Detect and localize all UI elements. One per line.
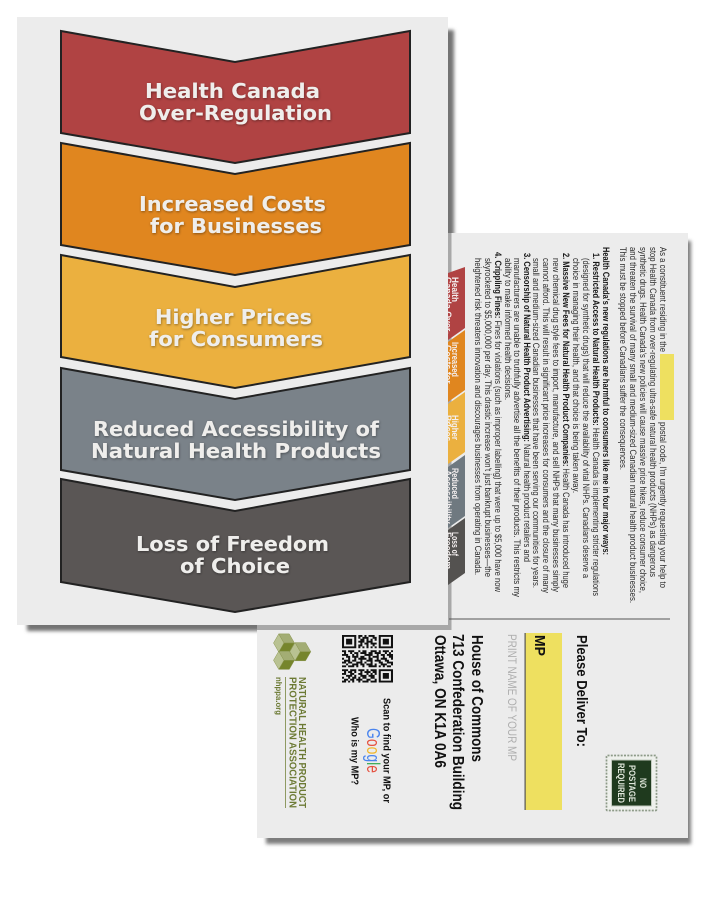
scan prompt with Google search: Googl e [363, 728, 383, 773]
mini chevron strip: Health [450, 277, 460, 302]
letter text block: small and medium-sized Canadian businesses that have been serving our communities for years. [531, 258, 541, 588]
letter text block: This must be stopped before Canadians suffer the consequences. [618, 247, 628, 470]
chevron 5: Loss of Freedom of Choice: of Choice [180, 554, 290, 578]
scan prompt with Google search: Scan to find your MP, or [380, 698, 392, 803]
chevron 2: Increased Costs for Businesses [61, 143, 410, 275]
mini chevron strip: Accessibility [443, 470, 453, 524]
panel: front of postcard [17, 17, 448, 625]
scan prompt with Google search [348, 698, 392, 803]
icon: no postage stamp: NO [638, 778, 648, 788]
letter text block: 4. Crippling Fines: Fines for violations (such as improper labelling) that were up to $5,000 have now [493, 252, 503, 593]
mailing address [431, 634, 485, 810]
letter text block: choice in managing their health, and that choice is being taken away. [571, 258, 581, 493]
chevron 3: Higher Prices for Consumers: for Consumers [149, 327, 323, 351]
chevron 3: Higher Prices for Consumers [61, 255, 410, 388]
mini chevron strip: Freedom [443, 532, 453, 569]
mini chevron strip: Loss of [450, 532, 460, 556]
mailing address: Ottawa, ON K1A 0A6 [431, 635, 448, 768]
scan prompt with Google search: Who is my MP? [348, 717, 360, 785]
chevron 2: Increased Costs for Businesses: for Businesses [150, 214, 322, 238]
mini chevron strip: Increased [450, 342, 460, 377]
letter text block: and threaten the survival of many small and medium-sized Canadian natural health product businesses. [628, 247, 638, 603]
letter text block: ability to make informed health decisions. [503, 258, 513, 400]
letter text block: heightened risk threatens innovation and discourages businesses from operating in Canada. [473, 258, 483, 575]
logo: NHPPA cubes and wordmark: nhppa.org [274, 677, 283, 715]
logo: NHPPA cubes and wordmark [274, 634, 311, 809]
mini chevron strip: Costs for [443, 345, 453, 384]
letter text block [473, 247, 674, 603]
letter text block: new chemical drug style fees to import, manufacture, and sell NHPs that many businesses simply [551, 258, 561, 593]
icon: no postage stamp [606, 756, 656, 810]
chevron 4: Reduced Accessibility of Natural Health Products: Reduced Accessibility of [93, 417, 380, 441]
mini chevron strip: Canada Over- [443, 277, 453, 334]
chevron 1: Health Canada Over-Regulation [61, 31, 410, 163]
MP name field: MP [531, 635, 547, 656]
delivery heading: Please Deliver To: [573, 635, 590, 747]
letter text block: As a constituent residing in the [658, 247, 668, 352]
logo: NHPPA cubes and wordmark: PROTECTION ASSOCIATION [286, 677, 298, 808]
letter text block: 1. Restricted Access to Natural Health Products: Health Canada is implementing stricter regulations [591, 253, 601, 597]
icon: no postage stamp: REQUIRED [616, 763, 626, 803]
letter text block: 3. Censorship of Natural Health Product Advertising: Natural health product retailers and [522, 253, 532, 562]
letter text block: (designed for synthetic drugs) that will reduce the availability of vital NHPs. Canadians deserve a [581, 258, 591, 578]
panel: back of postcard [257, 233, 691, 844]
letter text block: postal code, I'm urgently requesting your help to [658, 422, 668, 588]
logo: NHPPA cubes and wordmark: NATURAL HEALTH PRODUCT [296, 677, 307, 809]
QR code [342, 635, 393, 682]
chevron 1: Health Canada Over-Regulation: Over-Regulation [139, 101, 332, 125]
letter text block: 2. Massive New Fees for Natural Health Product Companies: Health Canada has introduced huge [561, 253, 571, 588]
letter text block: stop Health Canada from over-regulating ultra-safe natural health products (NHPs) as dangerous [648, 247, 658, 578]
chevron 2: Increased Costs for Businesses: Increased Costs [139, 192, 326, 216]
mini chevron strip [448, 267, 465, 585]
chevron 1: Health Canada Over-Regulation: Health Canada [145, 79, 320, 103]
MP name field [524, 633, 562, 810]
print name caption: PRINT NAME OF YOUR MP [505, 634, 517, 761]
letter text block: synthetic drugs. Health Canada's new policies will cause massive price hikes, reduce consumer choice, [638, 247, 648, 593]
chevron 4: Reduced Accessibility of Natural Health Products [61, 368, 410, 500]
icon: no postage stamp: POSTAGE [627, 765, 637, 802]
letter text block: skyrocketed to $5,000,000 per day. This drastic increase won't just bankrupt businesses—the [483, 258, 493, 577]
mini chevron strip: Reduced [450, 468, 460, 499]
chevron 4: Reduced Accessibility of Natural Health Products: Natural Health Products [91, 439, 381, 463]
mini chevron strip: Higher [450, 415, 460, 441]
chevron 5: Loss of Freedom of Choice [61, 479, 410, 612]
icon: three isometric cubes [274, 634, 311, 669]
letter text block: Health Canada's new regulations are harmful to consumers like me in four major ways: [601, 247, 611, 555]
mailing address: 713 Confederation Building [449, 634, 466, 810]
mini chevron strip: Prices [443, 415, 453, 442]
letter text block: cannot afford. This will result in significant price increases for consumers and the closure of many [541, 258, 551, 594]
chevron 5: Loss of Freedom of Choice: Loss of Freedom [136, 532, 329, 556]
chevron 3: Higher Prices for Consumers: Higher Prices [155, 305, 312, 329]
letter text block: manufacturers are unable to truthfully advertise all the benefits of their products. This restricts my [512, 258, 522, 598]
mailing address: House of Commons [468, 635, 485, 762]
